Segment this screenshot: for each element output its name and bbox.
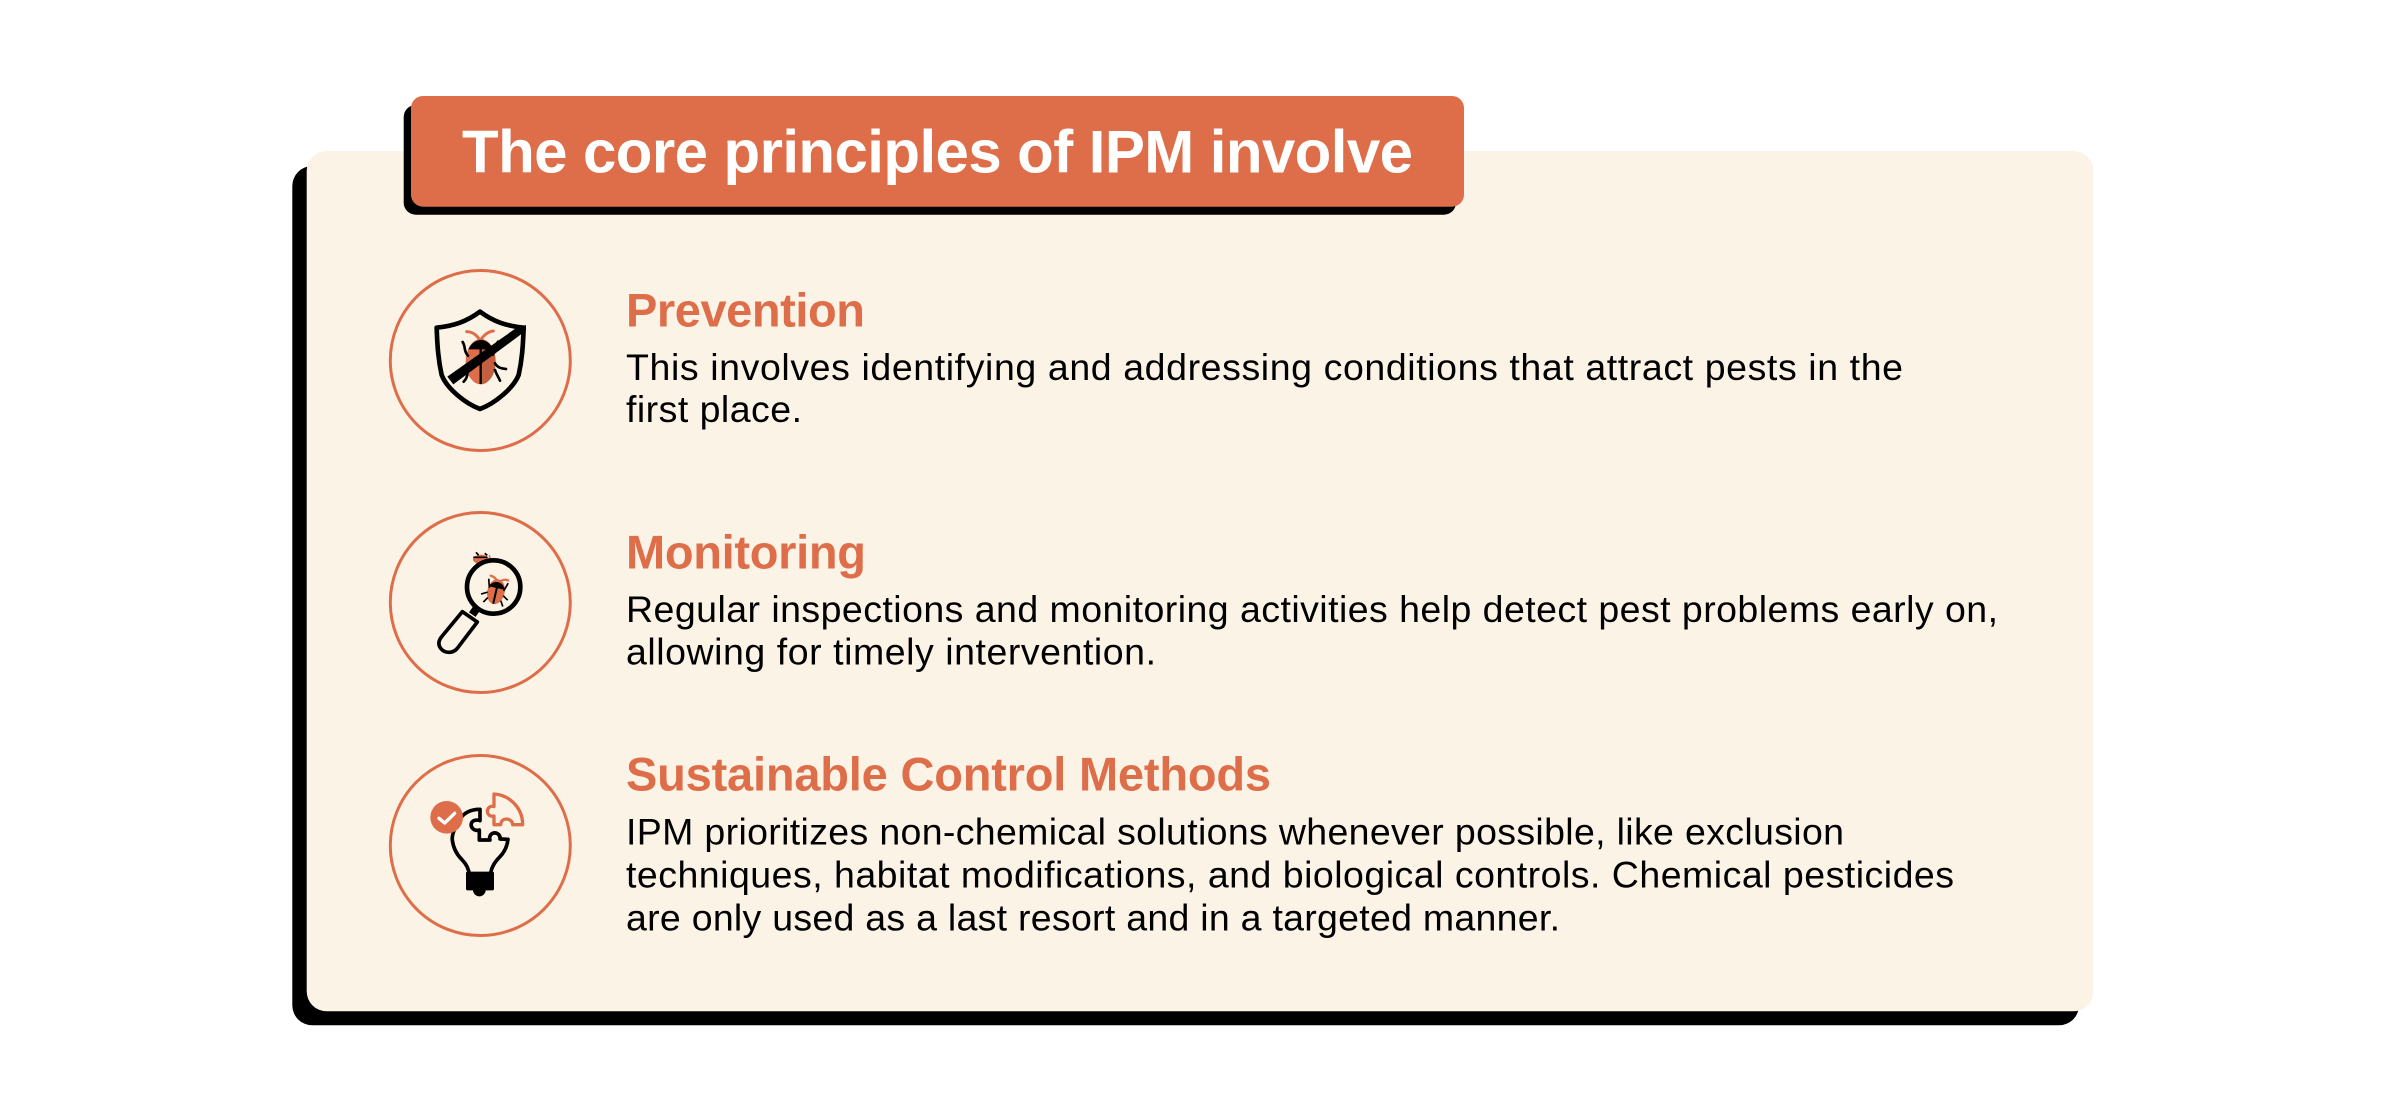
title banner: The core principles of IPM involve xyxy=(462,119,1413,186)
text: monitoring description xyxy=(626,588,1998,672)
text: prevention description xyxy=(626,346,1903,430)
text: sustainable control description: are only used as a last resort and in a targeted manner. xyxy=(626,897,1560,939)
icon: light bulb with puzzle piece xyxy=(390,756,570,936)
heading: Sustainable Control Methods: Sustainable Control Methods xyxy=(626,748,1271,801)
text: sustainable control description xyxy=(626,810,1954,939)
text: prevention description: This involves identifying and addressing conditions that attract pests in the xyxy=(626,346,1903,388)
text: sustainable control description: IPM prioritizes non-chemical solutions whenever possible, like exclusion xyxy=(626,810,1844,852)
text: sustainable control description: techniques, habitat modifications, and biological controls. Chemical pesticides xyxy=(626,853,1954,895)
text: monitoring description: allowing for timely intervention. xyxy=(626,630,1156,672)
text: monitoring description: Regular inspections and monitoring activities help detect pest problems early on, xyxy=(626,588,1998,630)
heading: Monitoring: Monitoring xyxy=(626,526,866,579)
heading: Prevention: Prevention xyxy=(626,284,865,337)
text: prevention description: first place. xyxy=(626,388,802,430)
icon: magnifying glass with bugs xyxy=(390,512,570,692)
panel: main card with shadow xyxy=(292,151,2093,1025)
title banner xyxy=(404,96,1464,215)
icon: shield with crossed-out bug xyxy=(390,270,570,450)
